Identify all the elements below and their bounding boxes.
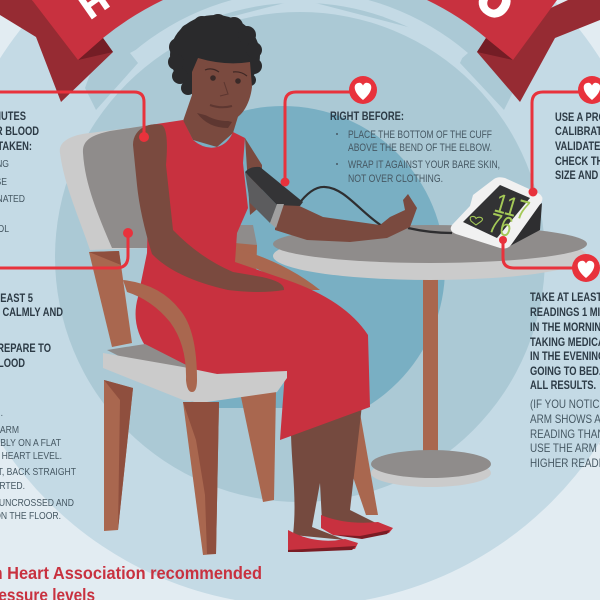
text: readings: ALL RESULTS. (530, 379, 596, 392)
monitor heart (470, 216, 482, 225)
text: readings (530, 291, 600, 470)
text: right before: RIGHT BEFORE: (330, 109, 404, 123)
text: right before: NOT OVER CLOTHING. (348, 173, 443, 185)
text: right before (330, 109, 500, 185)
jaw shadow (197, 113, 232, 128)
text: device (555, 111, 600, 182)
monitor reading 76: 76 (485, 207, 516, 243)
shoes (288, 515, 393, 552)
left ribbon (0, 0, 163, 102)
monitor reading 117: 117 (491, 187, 533, 226)
chair back (60, 125, 257, 250)
cuff (245, 167, 303, 228)
text: right before: PLACE THE BOTTOM OF THE CUFF (348, 129, 492, 141)
neck (183, 95, 240, 147)
text: right before: WRAP IT AGAINST YOUR BARE SKIN, (348, 159, 500, 171)
hair (168, 14, 262, 95)
text: readings: ARM SHOWS A (530, 413, 600, 426)
dress (136, 120, 370, 440)
callout line: smoking rules (0, 92, 148, 140)
callout line with heart: cuff (280, 76, 377, 186)
text: before measuring (left) (0, 110, 39, 235)
far arm skin (245, 138, 262, 215)
blood pressure monitor (451, 177, 542, 249)
callout line with heart: readings (499, 236, 600, 282)
chair frame rear (89, 243, 378, 515)
heading: recommended levels (0, 562, 262, 600)
legs (291, 405, 378, 540)
woman (133, 14, 417, 552)
callout line: rest before measuring (0, 230, 132, 268)
text: rest and position (left) (0, 292, 76, 522)
face (192, 58, 252, 121)
facial features (205, 69, 247, 107)
text: right before: ABOVE THE BEND OF THE ELBOW. (348, 142, 492, 154)
table with pole and base (273, 225, 587, 487)
callout line with heart: device (528, 76, 600, 196)
blood pressure tube (298, 187, 452, 233)
right ribbon (427, 0, 600, 102)
near arm (133, 124, 284, 292)
chair seat and front frame (103, 280, 287, 555)
forearm and hand (275, 194, 417, 242)
